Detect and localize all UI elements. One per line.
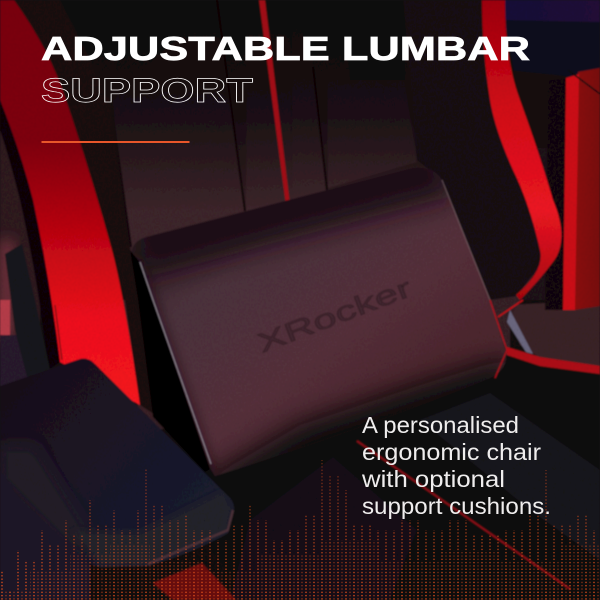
body text: with optional <box>361 466 505 492</box>
lumbar cushion <box>130 167 508 477</box>
seat <box>150 355 600 600</box>
chair backrest <box>14 0 542 430</box>
armrest <box>0 350 240 575</box>
body text: A personalised <box>362 412 519 438</box>
body text: support cushions. <box>362 493 551 519</box>
red straps on seat <box>357 300 600 589</box>
heading line 2 outlined: SUPPORT <box>41 72 253 110</box>
heading line 1: ADJUSTABLE LUMBAR <box>41 31 530 68</box>
red patch under armrest <box>153 563 236 600</box>
orange divider <box>42 141 190 143</box>
left red side panel <box>0 0 155 420</box>
body text <box>361 412 551 519</box>
body text: ergonomic chair <box>362 439 541 465</box>
right red side panel <box>482 0 562 300</box>
dotted orange equaliser pattern <box>0 455 600 600</box>
title <box>41 31 530 110</box>
centre red piping <box>259 0 290 206</box>
cushion logo: XRocker <box>253 273 415 359</box>
red storage box <box>545 68 600 310</box>
